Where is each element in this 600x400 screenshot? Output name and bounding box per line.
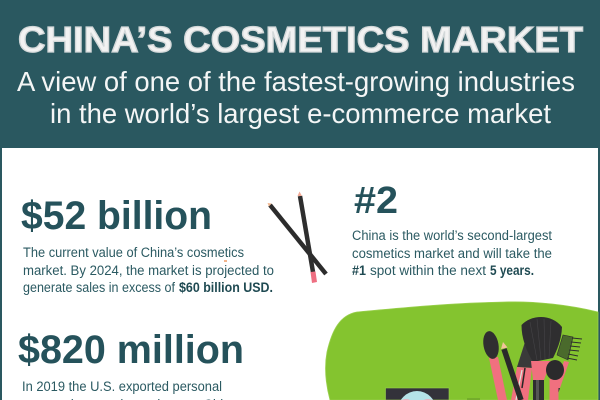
illustration: cosmetics on green shape — [326, 302, 598, 400]
stat: $820 million — [18, 328, 244, 400]
rank description — [352, 228, 552, 278]
stat heading: $52 billion — [21, 194, 212, 238]
small green item — [467, 398, 480, 400]
subtitle: A view of one of the fastest-growing industries — [17, 66, 575, 97]
title: CHINA’S COSMETICS MARKET — [18, 19, 583, 60]
subtitle: in the world’s largest e-commerce market — [50, 98, 551, 129]
content panel — [2, 148, 598, 400]
stat heading: $820 million — [18, 328, 244, 372]
stat description: $60 billion USD. — [179, 280, 273, 295]
rank description: spot within the next — [370, 263, 486, 278]
icon: makeup brushes — [481, 317, 582, 400]
subtitle — [17, 66, 575, 129]
rank description: #1 — [352, 263, 366, 278]
pencil — [504, 349, 521, 400]
rear brush — [517, 342, 533, 368]
rank description: China is the world’s second-largest — [352, 228, 552, 243]
icon: crossed pencils — [224, 192, 326, 283]
icon: eye shadow palette — [386, 388, 449, 400]
stat: #2 — [352, 180, 552, 278]
large brush — [522, 317, 562, 362]
stat description: generate sales in excess of — [23, 280, 175, 295]
rank heading: #2 — [354, 180, 398, 222]
stat description — [22, 379, 238, 400]
eyebrow brush — [557, 335, 573, 360]
rank description: 5 years. — [490, 263, 534, 278]
stat description: The current value of China’s cosmetics — [23, 245, 244, 260]
stat description: In 2019 the U.S. exported personal — [22, 379, 222, 394]
stat: $52 billion — [21, 194, 274, 295]
slim brush — [489, 357, 507, 400]
header — [17, 19, 583, 129]
round brush — [550, 379, 558, 400]
rank description: cosmetics market and will take the — [352, 246, 552, 261]
green blob — [326, 302, 598, 400]
stat description — [23, 245, 274, 295]
stat description: market. By 2024, the market is projected to — [23, 263, 274, 278]
